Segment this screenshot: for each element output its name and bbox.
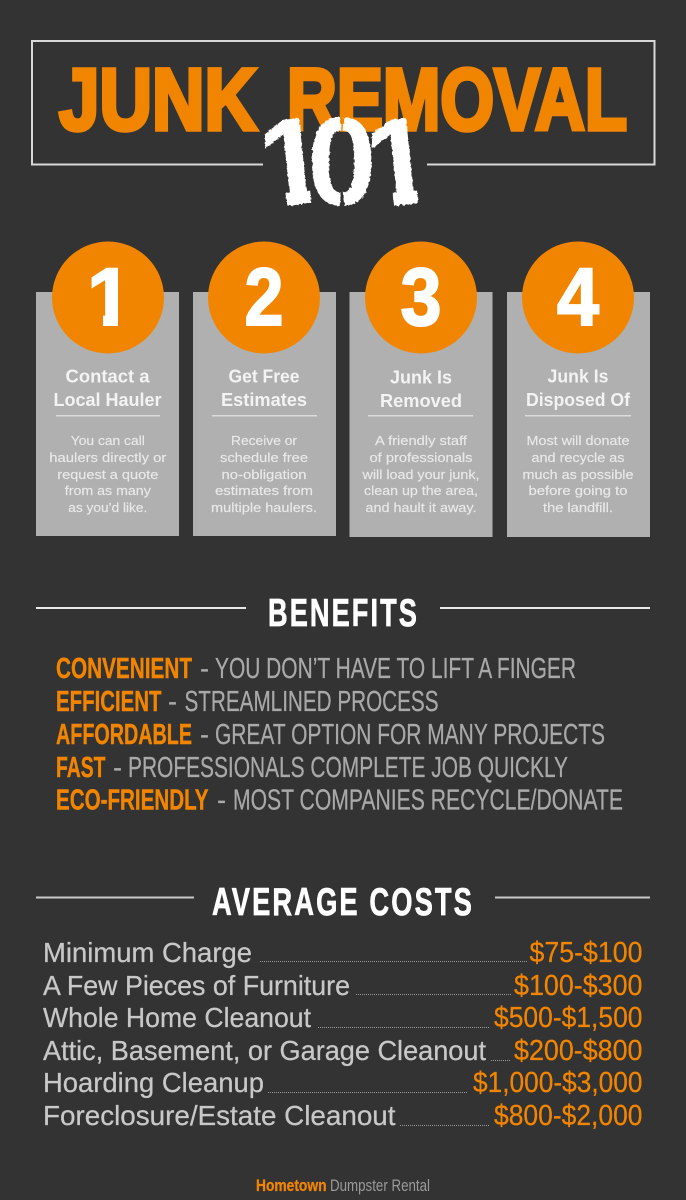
step 1 text: haulers directly or	[49, 450, 167, 465]
icon: number 3 circle	[365, 242, 477, 354]
title: 101: 0	[307, 93, 377, 232]
step 2 text	[211, 433, 317, 515]
icon: number 2 circle: 2	[244, 252, 284, 343]
footer logo	[256, 1176, 430, 1195]
footer logo: Dumpster Rental	[330, 1176, 430, 1195]
benefits list	[56, 653, 623, 816]
icon: number 4 circle	[522, 242, 634, 354]
benefit: convenient: CONVENIENT	[56, 653, 192, 685]
benefit: efficient	[56, 686, 438, 718]
step 2 heading: Estimates	[221, 390, 307, 410]
step 4 text: the landfill.	[543, 500, 613, 515]
step 4 heading	[526, 366, 631, 410]
title: 101: 1	[357, 90, 441, 235]
step 3 heading: Removed	[380, 391, 462, 411]
cost row: hoarding: $1,000-$3,000	[473, 1067, 642, 1099]
step 2 text: no-obligation	[222, 467, 306, 482]
benefit: affordable: -	[200, 719, 209, 751]
title: 101	[264, 116, 418, 206]
cost row: foreclosure: Foreclosure/Estate Cleanout	[43, 1100, 396, 1131]
step 2 text: multiple haulers.	[211, 500, 317, 515]
step 3 text	[361, 433, 480, 515]
title block	[31, 40, 656, 206]
cost row: whole home	[43, 1002, 642, 1034]
step 3 heading	[380, 368, 462, 411]
footer logo: Hometown	[256, 1176, 326, 1195]
cost row: hoarding	[43, 1067, 642, 1099]
step 1 text: request a quote	[57, 467, 158, 482]
step 4 text: and recycle as	[532, 450, 625, 465]
benefit: eco-friendly: ECO-FRIENDLY	[56, 784, 208, 816]
cost row: minimum charge	[43, 937, 642, 969]
step 2 heading	[221, 366, 307, 410]
step 1 heading	[54, 366, 162, 410]
step 3 text: A friendly staff	[375, 433, 467, 448]
panel: step 3	[350, 242, 492, 537]
icon: number 1 circle: 1	[87, 252, 133, 343]
step 3 text: of professionals	[370, 450, 473, 465]
step 1 text: from as many	[65, 483, 151, 498]
step 1 text: as you’d like.	[68, 500, 147, 515]
cost row: minimum charge: $75-$100	[530, 937, 642, 969]
heading: average costs: AVERAGE COSTS	[212, 881, 474, 924]
step 1 text: You can call	[71, 433, 145, 448]
costs table	[43, 937, 642, 1132]
benefit: affordable: AFFORDABLE	[56, 719, 192, 751]
step 3 text: will load your junk,	[361, 467, 480, 482]
step 3 text: and hault it away.	[366, 500, 476, 515]
panel: step 2	[193, 242, 336, 536]
cost row: furniture: A Few Pieces of Furniture	[43, 970, 350, 1001]
benefit: eco-friendly	[56, 784, 623, 816]
benefit: efficient: STREAMLINED PROCESS	[184, 686, 438, 718]
step 4 heading: Junk Is	[548, 366, 608, 386]
step 4 text: before going to	[528, 483, 628, 498]
cost row: foreclosure	[43, 1100, 642, 1132]
step 4 text: much as possible	[522, 467, 634, 482]
benefit: efficient: EFFICIENT	[56, 686, 162, 718]
benefit: convenient: -	[200, 653, 209, 685]
benefit: affordable	[56, 719, 605, 751]
cost row: hoarding: Hoarding Cleanup	[43, 1067, 264, 1098]
benefit: fast: -	[113, 752, 122, 784]
step 2 text: estimates from	[215, 483, 313, 498]
step 3 heading: Junk Is	[390, 368, 452, 388]
cost row: attic, basement, garage: Attic, Basement, or Garage Cleanout	[43, 1035, 486, 1066]
step 4 text	[522, 433, 634, 515]
step 2 text: Receive or	[231, 433, 298, 448]
title: junk removal	[59, 52, 627, 148]
panel: step 1	[36, 242, 179, 536]
icon: number 3 circle: 3	[400, 252, 442, 343]
title: junk removal: JUNK	[59, 52, 257, 148]
step 2 text: schedule free	[220, 450, 308, 465]
cost row: minimum charge: Minimum Charge	[43, 937, 252, 968]
title: 101: 1	[250, 90, 334, 235]
cost row: whole home: Whole Home Cleanout	[43, 1002, 311, 1033]
heading: benefits: BENEFITS	[268, 592, 419, 635]
benefit: eco-friendly: -	[217, 784, 226, 816]
step 2 heading: Get Free	[228, 366, 300, 386]
panel: step 4	[507, 242, 650, 537]
benefit: efficient: -	[168, 686, 177, 718]
icon: number 2 circle	[208, 242, 320, 354]
cost row: whole home: $500-$1,500	[494, 1002, 642, 1034]
step 1 heading: Contact a	[66, 366, 151, 386]
step 4 heading: Disposed Of	[526, 390, 631, 410]
icon: number 1 circle	[52, 242, 164, 354]
cost row: furniture: $100-$300	[514, 970, 642, 1002]
benefit: convenient	[56, 653, 576, 685]
benefit: fast	[56, 752, 568, 784]
cost row: attic, basement, garage: $200-$800	[514, 1035, 642, 1067]
step 1 heading: Local Hauler	[54, 390, 162, 410]
title frame	[32, 41, 654, 164]
benefit: fast: FAST	[56, 752, 106, 784]
icon: number 4 circle: 4	[557, 252, 599, 343]
step 3 text: clean up the area,	[364, 483, 478, 498]
step 4 text: Most will donate	[526, 433, 630, 448]
cost row: foreclosure: $800-$2,000	[494, 1100, 642, 1132]
cost row: furniture	[43, 970, 642, 1002]
step 1 text	[49, 433, 167, 515]
